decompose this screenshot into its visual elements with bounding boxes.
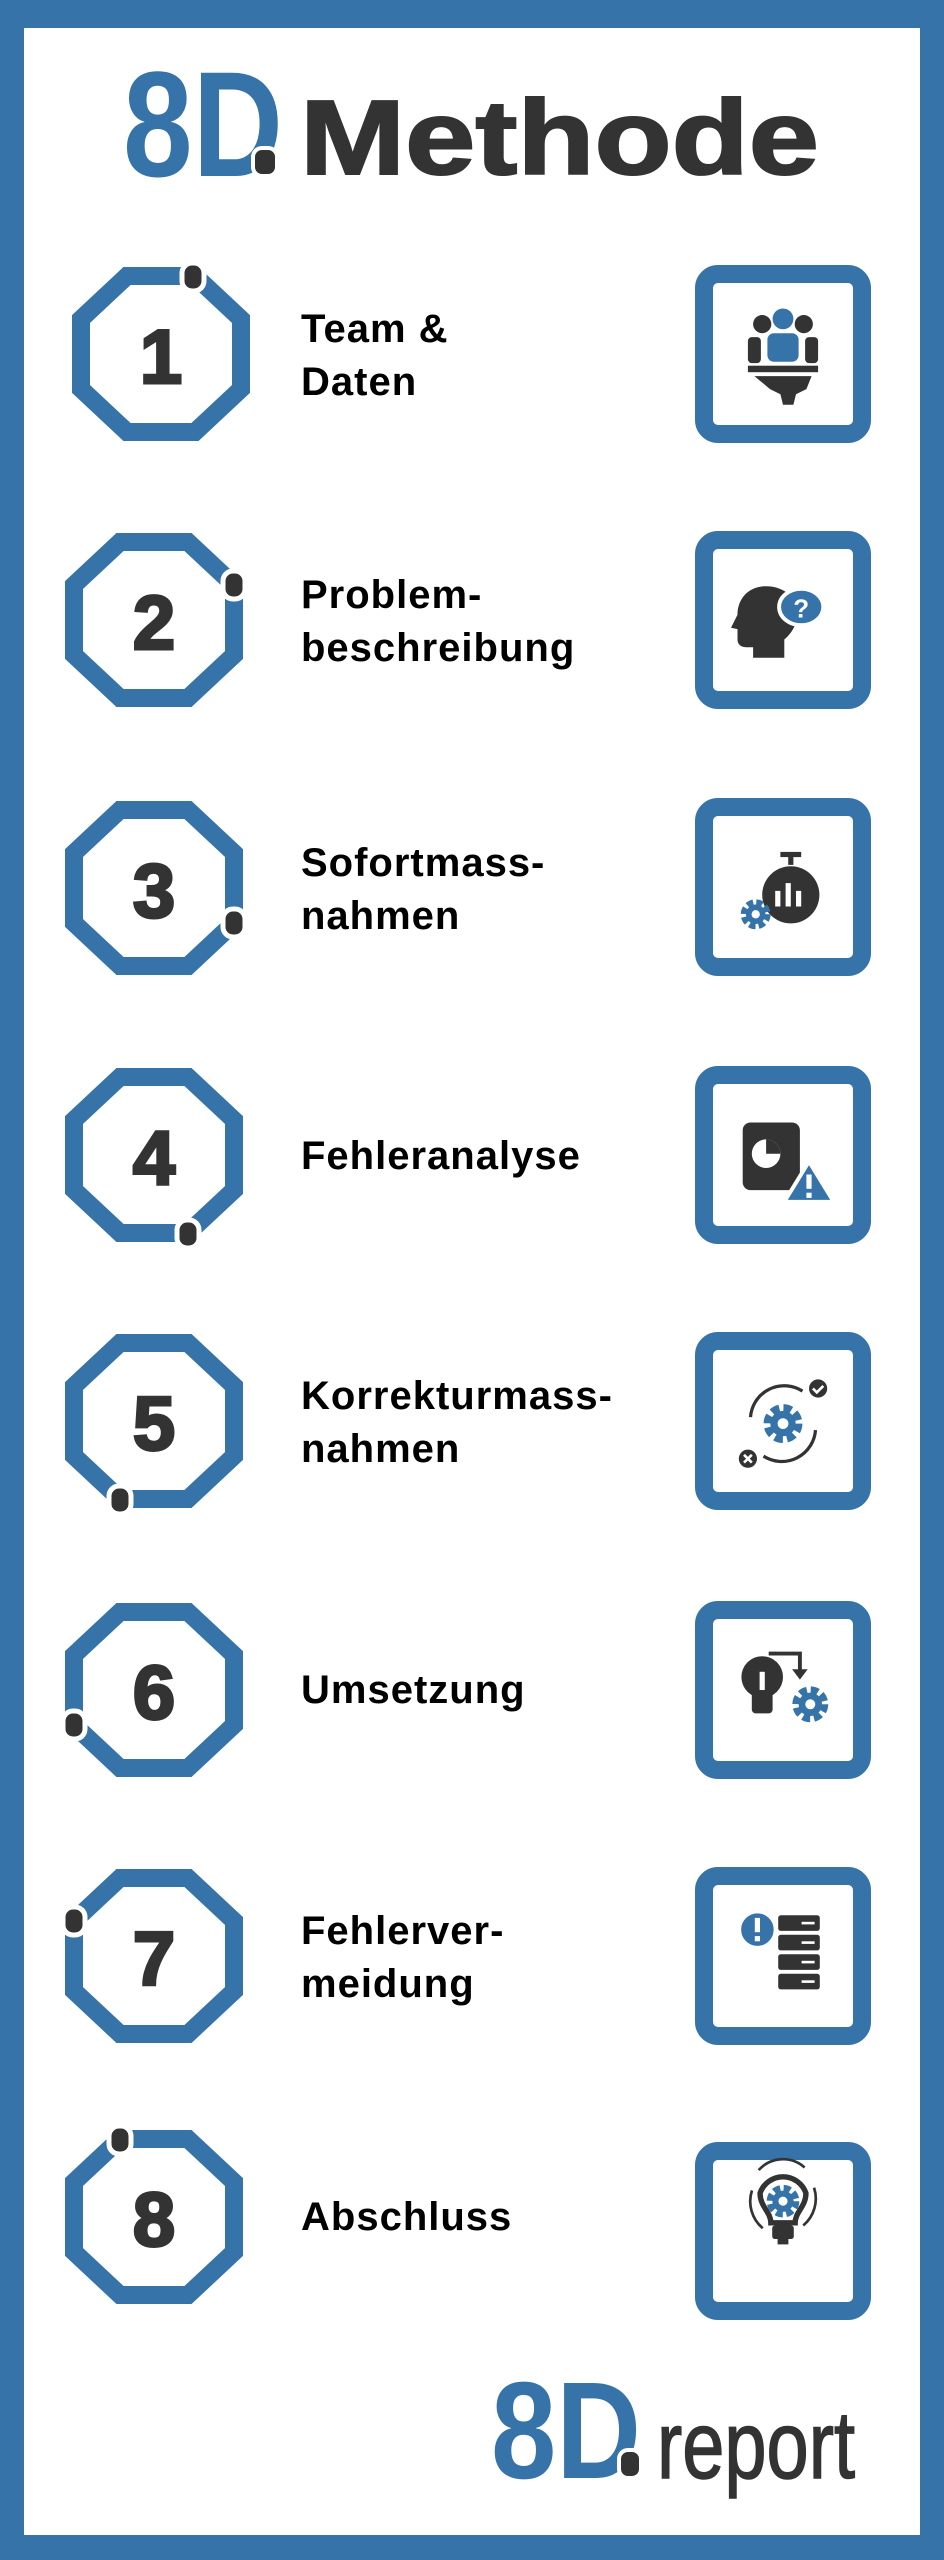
step 7: meidung (301, 1962, 475, 2006)
step 5: Korrekturmass- (301, 1374, 613, 1418)
step 8: Abschluss (301, 2195, 512, 2239)
step 3: nahmen (301, 894, 460, 938)
step 7: Fehlerver- (301, 1909, 504, 1953)
step 4: 4 (133, 1116, 175, 1201)
step 1: 1 (140, 315, 182, 400)
step 6: 6 (133, 1651, 175, 1736)
step 3: 3 (133, 849, 175, 934)
icon: cycle gear (739, 1379, 827, 1468)
title: 8D (123, 40, 283, 208)
icon: document warning (743, 1122, 834, 1202)
step 3 (74, 807, 862, 967)
step 2 (74, 540, 862, 700)
step 2: Problem- (301, 573, 482, 617)
step 6 (63, 1610, 862, 1770)
icon: team gear (748, 308, 818, 405)
step 8 (74, 2126, 862, 2311)
step 2: beschreibung (301, 626, 575, 670)
title: Methode (300, 79, 819, 197)
icon: head question (731, 586, 823, 658)
step 4 (74, 1075, 862, 1248)
step 2: 2 (133, 581, 175, 666)
icon: stopwatch (744, 852, 819, 926)
icon: bulb arrow gear (741, 1654, 824, 1718)
step 3: Sofortmass- (301, 841, 545, 885)
icon: head question: ? (793, 593, 809, 623)
logo: 8D report (491, 2354, 855, 2508)
step 1 (81, 263, 862, 434)
icon: bulb gear (750, 2159, 816, 2244)
step 7 (63, 1876, 862, 2036)
step 7: 7 (133, 1917, 175, 2002)
step 5: 5 (133, 1382, 175, 1467)
step 5: nahmen (301, 1427, 460, 1471)
title (123, 40, 819, 208)
step 8: 8 (133, 2178, 175, 2263)
logo: 8D report: report (657, 2392, 855, 2499)
logo: 8D report: 8D (491, 2354, 641, 2508)
step 5 (74, 1341, 862, 1514)
step 1: Daten (301, 360, 417, 404)
icon: server warning (739, 1911, 820, 1989)
step 4: Fehleranalyse (301, 1134, 581, 1178)
step 6: Umsetzung (301, 1668, 526, 1712)
step 1: Team & (301, 307, 449, 351)
